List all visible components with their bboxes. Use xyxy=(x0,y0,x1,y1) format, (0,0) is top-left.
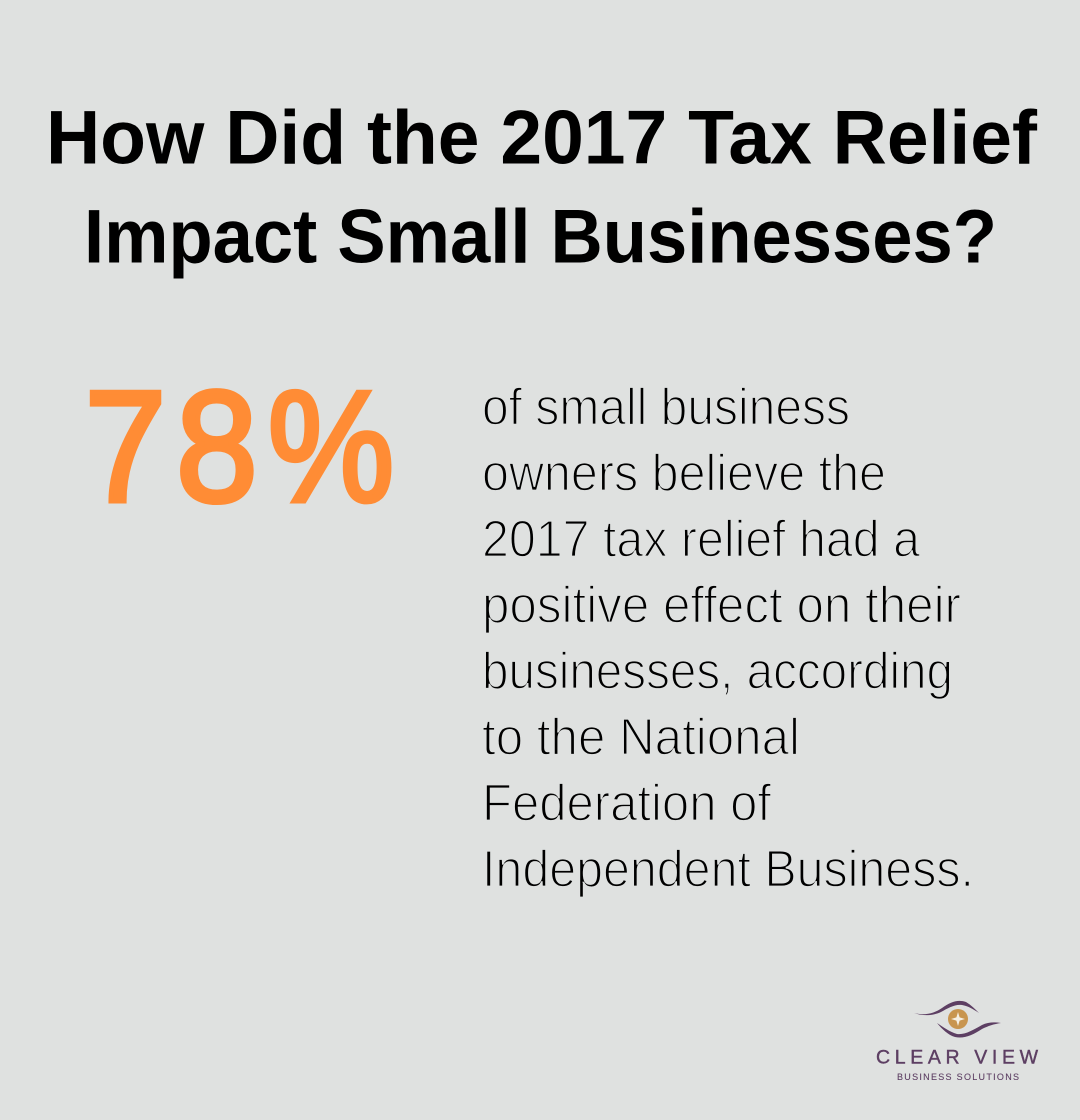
description text: Federation of xyxy=(482,774,772,832)
big statistic: 78% xyxy=(85,358,394,535)
description text: positive effect on their xyxy=(482,576,961,634)
title xyxy=(46,96,1038,280)
logo wordmark: CLEAR VIEW xyxy=(876,1046,1039,1068)
description text: 2017 tax relief had a xyxy=(482,510,920,568)
big statistic: 78%: 8 xyxy=(176,359,258,535)
description text: owners believe the xyxy=(482,444,886,502)
icon: eye with star xyxy=(914,1001,1001,1038)
big statistic: 78%: % xyxy=(268,358,394,535)
description text: to the National xyxy=(482,708,800,766)
title: Impact Small Businesses? xyxy=(84,194,997,280)
logo: Clear View Business Solutions xyxy=(876,1001,1039,1082)
description text: Independent Business. xyxy=(482,840,974,898)
description text xyxy=(482,378,974,898)
title: How Did the 2017 Tax Relief xyxy=(46,96,1038,180)
description text: of small business xyxy=(482,378,850,436)
logo tagline: BUSINESS SOLUTIONS xyxy=(897,1072,1019,1082)
big statistic: 78%: 7 xyxy=(85,359,166,535)
description text: businesses, according xyxy=(482,642,953,700)
